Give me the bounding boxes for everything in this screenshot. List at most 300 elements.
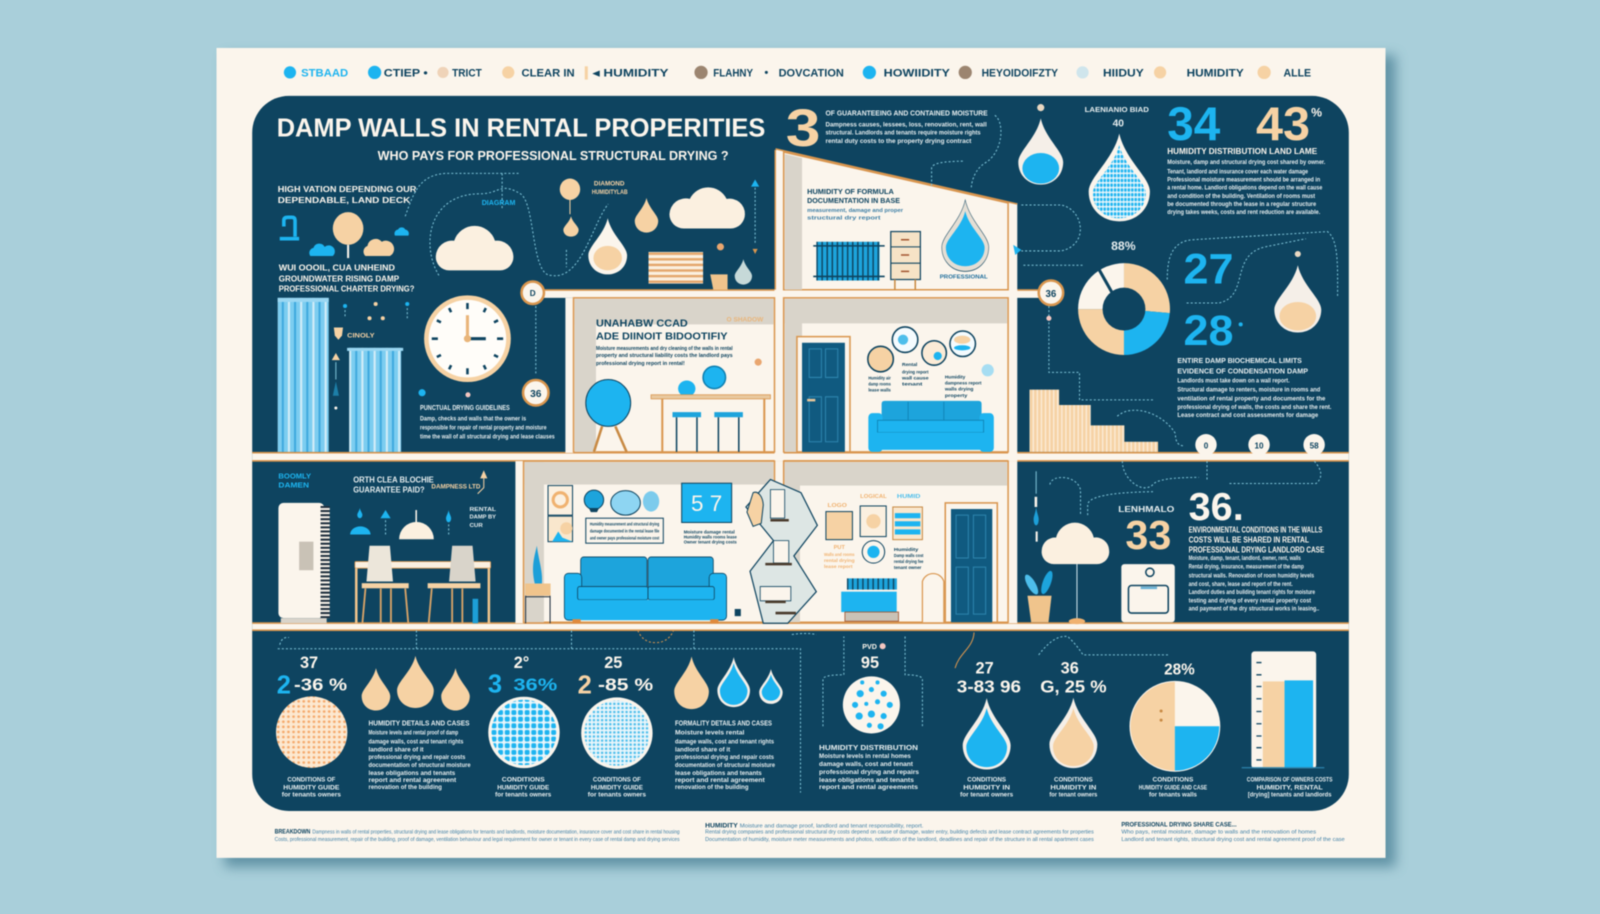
- attic heading: [807, 187, 900, 205]
- question text: WUI OOOIL, CUA UNHEIND: [279, 263, 395, 272]
- bar chart: [1242, 651, 1324, 768]
- footer notes: [275, 821, 1345, 843]
- dashed route: [932, 115, 1001, 188]
- cloud: [669, 187, 745, 228]
- screen caption: Owner tenant drying costs: [684, 540, 737, 545]
- stat text: ENVIRONMENTAL CONDITIONS IN THE WALLS: [1189, 525, 1323, 534]
- dotted circle blue: [488, 697, 560, 768]
- text block: lease obligations and tenants: [675, 770, 762, 777]
- icon: peach cloud: [364, 239, 394, 256]
- big dot circle: [843, 676, 900, 733]
- footnote 3: [1121, 821, 1345, 843]
- caption: HUMIDITY IN: [963, 785, 1010, 792]
- text block: HUMIDITY DETAILS AND CASES: [369, 718, 469, 727]
- striped board: [649, 252, 703, 284]
- small wall text: dampness report: [945, 381, 982, 386]
- dotted circle light blue: [581, 697, 653, 769]
- drop marker: [446, 510, 451, 535]
- panel: room row 2 right: [784, 298, 1008, 452]
- legend item: ◂ HUMIDITY: [592, 68, 669, 80]
- legend item: TRICT: [452, 68, 482, 80]
- panel: attic room: [776, 149, 1017, 290]
- text block: [819, 743, 920, 791]
- dining table: [355, 562, 491, 623]
- drawers: [891, 232, 920, 290]
- dashed route: [1049, 302, 1184, 446]
- legend item: HUMIDITY: [1187, 68, 1244, 80]
- panel: room bottom-left row 2: [574, 298, 774, 452]
- stat 2: [488, 654, 557, 699]
- caption: for tenants owners: [282, 792, 342, 799]
- wall notes: Humidity: [894, 547, 919, 552]
- legend item: [694, 66, 754, 80]
- second stat text: professional drying of walls, the costs and share the rent.: [1177, 404, 1332, 411]
- small wall text: Humidity: [945, 374, 966, 379]
- label: LENHMALO: [1118, 505, 1174, 514]
- stat 7: 28%: [1164, 661, 1195, 678]
- panel: room row 3 right: [784, 461, 1008, 622]
- second stat text: ventilation of rental property and documents for the: [1177, 395, 1326, 402]
- pendant lamp: [399, 510, 434, 539]
- caption: CONDITIONS: [1153, 776, 1193, 783]
- legend item: CTIEP •: [384, 68, 428, 80]
- cloud lamp: [1042, 523, 1109, 624]
- round badges: [868, 327, 994, 376]
- attic text: [807, 208, 904, 221]
- dot: [1239, 322, 1243, 326]
- footnote 1: [275, 828, 680, 843]
- stat text: Professional moisture measurement should be arranged in: [1167, 177, 1320, 184]
- stat text: COSTS WILL BE SHARED IN RENTAL: [1189, 535, 1309, 544]
- second stat text: Landlords must take down on a wall report.: [1177, 378, 1290, 385]
- radiator bench: [841, 578, 899, 621]
- room text: [596, 346, 733, 367]
- caption: [drying] tenants and landlords: [1248, 792, 1332, 799]
- attic top text: structural. Landlords and tenants require moisture rights: [826, 130, 981, 137]
- footnote 2: Moisture and damage proof, landlord and tenant responsibility, report.: [740, 823, 924, 829]
- footnote 1: Dampness in walls of rental properties, structural drying and lease obligations for tenants and landlords, moisture documentation, insurance cover and cost share in rental housing: [312, 829, 680, 835]
- note text: RENTAL: [469, 507, 497, 513]
- footnote 3: PROFESSIONAL DRYING SHARE CASE...: [1121, 821, 1237, 828]
- dashed connector: [405, 173, 608, 276]
- dashed routes: [1050, 461, 1321, 515]
- legend item: [1154, 66, 1244, 80]
- plant on stand: [525, 546, 551, 623]
- text block: damage walls, cost and tenant: [819, 761, 913, 768]
- clock caption: PUNCTUAL DRYING GUIDELINES: [420, 404, 510, 412]
- stat text: a rental home. Landlord obligations depend on the wall cause: [1167, 185, 1323, 192]
- legend item: STBAAD: [301, 68, 348, 80]
- stat 6: 36: [1061, 659, 1079, 677]
- stat 3: 2: [578, 672, 592, 700]
- caption: CONDITIONS: [1054, 776, 1093, 783]
- caption: [588, 776, 647, 799]
- arched frame: [922, 574, 944, 622]
- caption: HUMIDITY GUIDE: [497, 785, 549, 792]
- caption: [1049, 776, 1098, 799]
- stat text: Moisture, damp, tenant, landlord, owner, rent, walls: [1189, 555, 1301, 562]
- potted plant: [1022, 570, 1055, 622]
- icon: blue small cloud: [394, 227, 409, 236]
- caption: [1139, 776, 1207, 799]
- text block: Moisture levels rental: [675, 729, 745, 736]
- footnote 2: Documentation of humidity, moisture meter measurements and photos, notification of the landlord, deadlines and repair of the structure in all rental apartment cases: [705, 837, 1094, 843]
- text block: report and rental agreements: [819, 784, 919, 791]
- peach drops: [362, 656, 470, 710]
- connector dot line: [565, 250, 567, 267]
- clock: [424, 295, 511, 382]
- stat text: PROFESSIONAL DRYING LANDLORD CASE: [1189, 545, 1325, 554]
- small dot: [717, 243, 724, 250]
- door: [945, 503, 997, 622]
- drops row: [674, 657, 783, 709]
- stat text: testing and drying of every rental property cost: [1189, 597, 1311, 604]
- caption: for tenants walls: [1149, 792, 1198, 799]
- stat 4: PVD: [862, 643, 877, 651]
- second stat text: [1177, 356, 1332, 419]
- caption: PROFESSIONAL: [940, 274, 988, 280]
- stat 6: [1040, 659, 1107, 697]
- screen: 5 7: [691, 491, 722, 516]
- wall pictures: [548, 486, 573, 542]
- chair: [362, 546, 409, 623]
- caption: for tenants owners: [495, 792, 552, 799]
- labels: BOOMLY: [278, 472, 311, 480]
- footnote 1: BREAKDOWN: [275, 828, 310, 835]
- blue drop: [963, 698, 1011, 770]
- blue lamp: [350, 508, 371, 535]
- dashed routes: [1021, 205, 1338, 303]
- icon: peach lollipop: [333, 212, 363, 258]
- text block: Moisture levels and rental proof of damp: [369, 729, 458, 736]
- stat 4: 95: [861, 654, 879, 672]
- attic text: structural dry report: [807, 215, 881, 221]
- attic top text: OF GUARANTEEING AND CONTAINED MOISTURE: [826, 109, 988, 117]
- radiator tall: [278, 298, 329, 452]
- stat text: Rental drying, insurance, measurement of the damp: [1189, 564, 1304, 571]
- room text: professional drying report in rental!: [596, 361, 685, 367]
- room heading: [596, 318, 728, 343]
- badge: [523, 380, 549, 405]
- stat 5: 27: [976, 659, 994, 677]
- stat 6: G, 25 %: [1040, 677, 1107, 697]
- footnote 3: Landlord and tenant rights, structural drying cost and rental agreement proof of the case: [1121, 837, 1345, 843]
- small markers: [343, 302, 409, 320]
- caption: for tenant owners: [1049, 792, 1098, 799]
- legend item: [863, 66, 951, 80]
- text block: landlord share of it: [675, 746, 730, 753]
- footnote 3: Who pays, rental moisture, damage to walls and the renovation of homes: [1121, 829, 1316, 835]
- small wall text: Humidity air: [868, 375, 891, 380]
- question text: PROFESSIONAL CHARTER DRYING?: [279, 285, 414, 294]
- peach drop: [635, 198, 658, 233]
- stat 1: 2: [277, 672, 291, 700]
- stat 5: [957, 659, 1021, 697]
- stat 34: 34: [1167, 98, 1220, 150]
- wall notes: Damp walls cost: [894, 553, 924, 558]
- wall notes: lease report: [824, 564, 853, 569]
- stat 2: 36%: [513, 675, 557, 695]
- dotted circle peach: [276, 696, 347, 768]
- vase: [678, 380, 695, 397]
- stat text: and condition of the building. Ventilation of rooms must: [1167, 193, 1315, 200]
- caption: CONDITIONS: [967, 776, 1006, 783]
- text block: professional drying and repairs: [819, 769, 920, 776]
- labels: DAMEN: [278, 482, 309, 490]
- attic text: measurement, damage and proper: [807, 208, 904, 214]
- attic top text: [826, 109, 988, 145]
- wall notes: tenant owner: [894, 565, 922, 570]
- second stat text: Lease contract and cost assessments for damage: [1177, 412, 1319, 419]
- stat 1: 37: [300, 654, 318, 672]
- numeral 3: 3: [786, 99, 820, 158]
- room text: property and structural liability costs the landlord pays: [596, 353, 733, 359]
- chair: [586, 379, 631, 452]
- badge: 36: [530, 389, 542, 400]
- caption: HUMIDITY GUIDE: [283, 785, 339, 792]
- screen caption: Moisture damage rental: [684, 530, 735, 535]
- icon: tap: [280, 217, 299, 239]
- pictures: [826, 506, 922, 540]
- stat 1: [277, 654, 347, 700]
- panel: living room row 3: [524, 461, 774, 623]
- attic heading: DOCUMENTATION IN BASE: [807, 196, 900, 205]
- legend item: HIIDUY: [1103, 68, 1144, 80]
- label: HUMIDITYLAB: [592, 189, 628, 196]
- note text: DAMP BY: [469, 515, 496, 521]
- second stat text: ENTIRE DAMP BIOCHEMICAL LIMITS: [1177, 356, 1302, 365]
- badge: D: [530, 289, 536, 298]
- panel: dark right row 3: [1022, 461, 1325, 624]
- dot: [1037, 104, 1044, 111]
- caption: for tenant owners: [960, 792, 1014, 799]
- intro text: [278, 185, 417, 205]
- text block: professional drying and repair costs: [675, 754, 775, 761]
- text block: FORMALITY DETAILS AND CASES: [675, 718, 772, 727]
- card shadow: [225, 55, 1396, 867]
- title: DAMP WALLS IN RENTAL PROPERITIES: [277, 115, 765, 143]
- radiator: [813, 242, 885, 281]
- up arrow: [380, 510, 391, 535]
- spiral stairs: [746, 479, 817, 623]
- radiator short: [347, 348, 403, 452]
- panel: dark dining row 3: [278, 470, 497, 623]
- stat text: Moisture, damp and structural drying cost shared by owner.: [1167, 159, 1326, 166]
- label number: 40: [1113, 118, 1124, 129]
- text block: Moisture levels in rental homes: [819, 753, 911, 760]
- badges row: 10: [1255, 441, 1264, 450]
- question text: [279, 263, 414, 294]
- caption: CONDITIONS OF: [593, 776, 641, 783]
- peach balloon: [560, 179, 580, 237]
- floor bands: [252, 150, 1349, 631]
- clock caption: time the wall of all structural drying and lease clauses: [420, 434, 555, 441]
- room heading: ADE DIINOIT BIDOOTIFIY: [596, 332, 728, 343]
- stat 2: 3: [488, 671, 502, 699]
- peach water drop: [1274, 265, 1321, 333]
- dehumidifier: [278, 503, 330, 623]
- peach drop: [1049, 698, 1097, 768]
- direction arrows: [332, 353, 340, 410]
- peach connector: [955, 632, 974, 668]
- labels: [278, 472, 311, 490]
- wall icons: [584, 490, 659, 515]
- stat 2: 2°: [514, 654, 529, 672]
- badge: [1039, 281, 1063, 305]
- stat 3: [578, 654, 653, 700]
- legend item: [1258, 66, 1312, 80]
- grey drop: [735, 259, 752, 285]
- text block: damage walls, cost and tenant rights: [369, 739, 464, 746]
- caption: CONDITIONS OF: [287, 776, 336, 783]
- second stat text: EVIDENCE OF CONDENSATION DAMP: [1177, 366, 1308, 375]
- dashed network: [278, 630, 1169, 793]
- caption: [495, 776, 552, 799]
- text box: damage documented in the rental lease file: [590, 528, 660, 533]
- badges row: 58: [1310, 441, 1319, 450]
- legend item: FLAHNY: [713, 68, 754, 80]
- small wall text: walls drying: [944, 387, 974, 392]
- caption: HUMIDITY, RENTAL: [1256, 785, 1323, 792]
- caption: [960, 776, 1014, 799]
- big speckled drop: [1089, 134, 1150, 221]
- wall notes: Walls and rooms: [824, 552, 855, 557]
- arrow: [478, 470, 487, 494]
- legend item: [284, 66, 348, 80]
- legend item: HOWIIDITY: [884, 68, 951, 80]
- stat text: Landlord duties and building tenant rights for moisture: [1189, 589, 1316, 596]
- panel: top right statistics: [1013, 98, 1338, 455]
- wall notes: [824, 494, 924, 570]
- stat 1: -36 %: [294, 675, 347, 695]
- large drop: [942, 200, 989, 271]
- peach note: DAMPNESS LTD: [431, 484, 481, 491]
- pie chart: [1129, 681, 1220, 772]
- stat text: drying takes weeks, costs and rent reduction are available.: [1167, 209, 1321, 216]
- stat 33: 33: [1125, 512, 1171, 558]
- text block: report and rental agreement: [675, 777, 765, 784]
- footnote 2: [705, 822, 1094, 843]
- intro text: DEPENDABLE, LAND DECK: [278, 196, 410, 205]
- legend item: ALLE: [1284, 68, 1312, 80]
- note text: CUR: [469, 523, 483, 529]
- intro text: HIGH VATION DEPENDING OUR: [278, 185, 417, 194]
- caption: HUMIDITY GUIDE: [591, 785, 643, 792]
- dot: [1295, 251, 1301, 257]
- second stat text: Structural damage to renters, moisture in rooms and: [1177, 387, 1320, 394]
- legend item: [502, 66, 575, 80]
- text block: lease obligations and tenants: [819, 777, 915, 784]
- text block: HUMIDITY DISTRIBUTION: [819, 743, 918, 752]
- dot: [755, 359, 762, 366]
- screen: [682, 483, 732, 522]
- small wall text: tenant: [902, 382, 923, 387]
- caption: [1247, 776, 1332, 799]
- panel: top left intro: [278, 173, 759, 452]
- icon: blue cloud: [309, 244, 335, 256]
- text box: and owner pays professional moisture cost: [590, 536, 660, 541]
- text box: Humidity measurement and structural drying: [590, 521, 659, 526]
- text block: damage walls, cost and tenant rights: [675, 739, 775, 746]
- clock caption: Damp, checks and walls that the owner is: [420, 415, 527, 422]
- room heading: UNAHABW CCAD: [596, 318, 688, 329]
- cloud: [436, 226, 513, 270]
- table and stools: [651, 395, 770, 452]
- arrows: [751, 180, 759, 254]
- stat text: Tenant, landlord and insurance cover each water damage: [1167, 168, 1309, 175]
- drop with blue water: [1018, 118, 1063, 185]
- stat text: be documented through the lease in a regular structure: [1167, 201, 1317, 208]
- shield and label: CINOLY: [347, 333, 375, 340]
- caption: [282, 776, 342, 799]
- shield and label: [334, 327, 375, 340]
- stat text: and payment of the dry structural works in leasing..: [1189, 606, 1319, 613]
- clock caption: responsible for repair of rental property and moisture: [420, 424, 547, 431]
- caption: CONDITIONS: [502, 776, 545, 783]
- donut chart: [1078, 263, 1170, 355]
- pink dot: [1046, 316, 1051, 321]
- percent: %: [1311, 105, 1322, 119]
- legend item: [585, 66, 669, 80]
- small wall text: lease walls: [868, 388, 891, 393]
- wall notes: rental drying: [824, 558, 855, 563]
- wall notes: HUMID: [897, 494, 921, 500]
- chair: [428, 546, 480, 623]
- small wall text: wall cause: [901, 375, 929, 380]
- text block: landlord share of it: [369, 746, 424, 753]
- legend item: [959, 66, 1059, 80]
- wall notes: PUT: [834, 545, 846, 551]
- small wall text: property: [945, 393, 968, 398]
- text block: renovation of the building: [675, 784, 749, 791]
- screen caption: [684, 530, 737, 545]
- text block: documentation of structural moisture: [369, 762, 471, 769]
- legend item: [368, 66, 428, 80]
- text block: documentation of structural moisture: [675, 762, 776, 769]
- stat text: HUMIDITY DISTRIBUTION LAND LAME: [1167, 147, 1318, 156]
- stat text: and cost, share, lease and report of the rent.: [1189, 581, 1293, 588]
- blue sofa: [564, 557, 727, 623]
- badges row: 0: [1204, 441, 1209, 450]
- dashed line: [535, 306, 537, 373]
- legend item: HEYOIDOIFZTY: [982, 68, 1059, 80]
- blue cylinder: [473, 599, 478, 623]
- stair bars: [1030, 390, 1158, 452]
- label: DIAGRAM: [482, 199, 515, 207]
- small wall text: Rental: [902, 362, 917, 367]
- stat text: [1189, 525, 1325, 613]
- small wall text: [868, 362, 982, 398]
- sofa: [868, 401, 994, 452]
- legend item: [1076, 66, 1144, 80]
- drop: half filled: [588, 218, 627, 274]
- label: [592, 181, 628, 196]
- question text: ORTH CLEA BLOCHIE: [353, 476, 434, 485]
- small label: O SHADOW: [727, 316, 764, 323]
- caption: HUMIDITY IN: [1050, 785, 1096, 792]
- drop line: [1034, 471, 1039, 542]
- text block: professional drying and repair costs: [369, 754, 466, 761]
- footnote 1: Costs, professional measurement, repair of the building, proof of damage, ventilation behaviour and legal requirement for owner or tenant in every case of rental damp and drying services: [275, 837, 680, 843]
- attic top text: Dampness causes, lessees, loss, renovation, rent, wall: [826, 121, 987, 128]
- small wall text: damp rooms: [868, 382, 891, 387]
- stat 5: 3-83 96: [957, 677, 1021, 697]
- washer: [1121, 564, 1175, 622]
- wall notes: rental drying fee: [894, 559, 924, 564]
- clock caption: [420, 404, 555, 441]
- attic heading: HUMIDITY OF FORMULA: [807, 187, 894, 196]
- screen caption: Humidity walls rooms lease: [684, 535, 737, 540]
